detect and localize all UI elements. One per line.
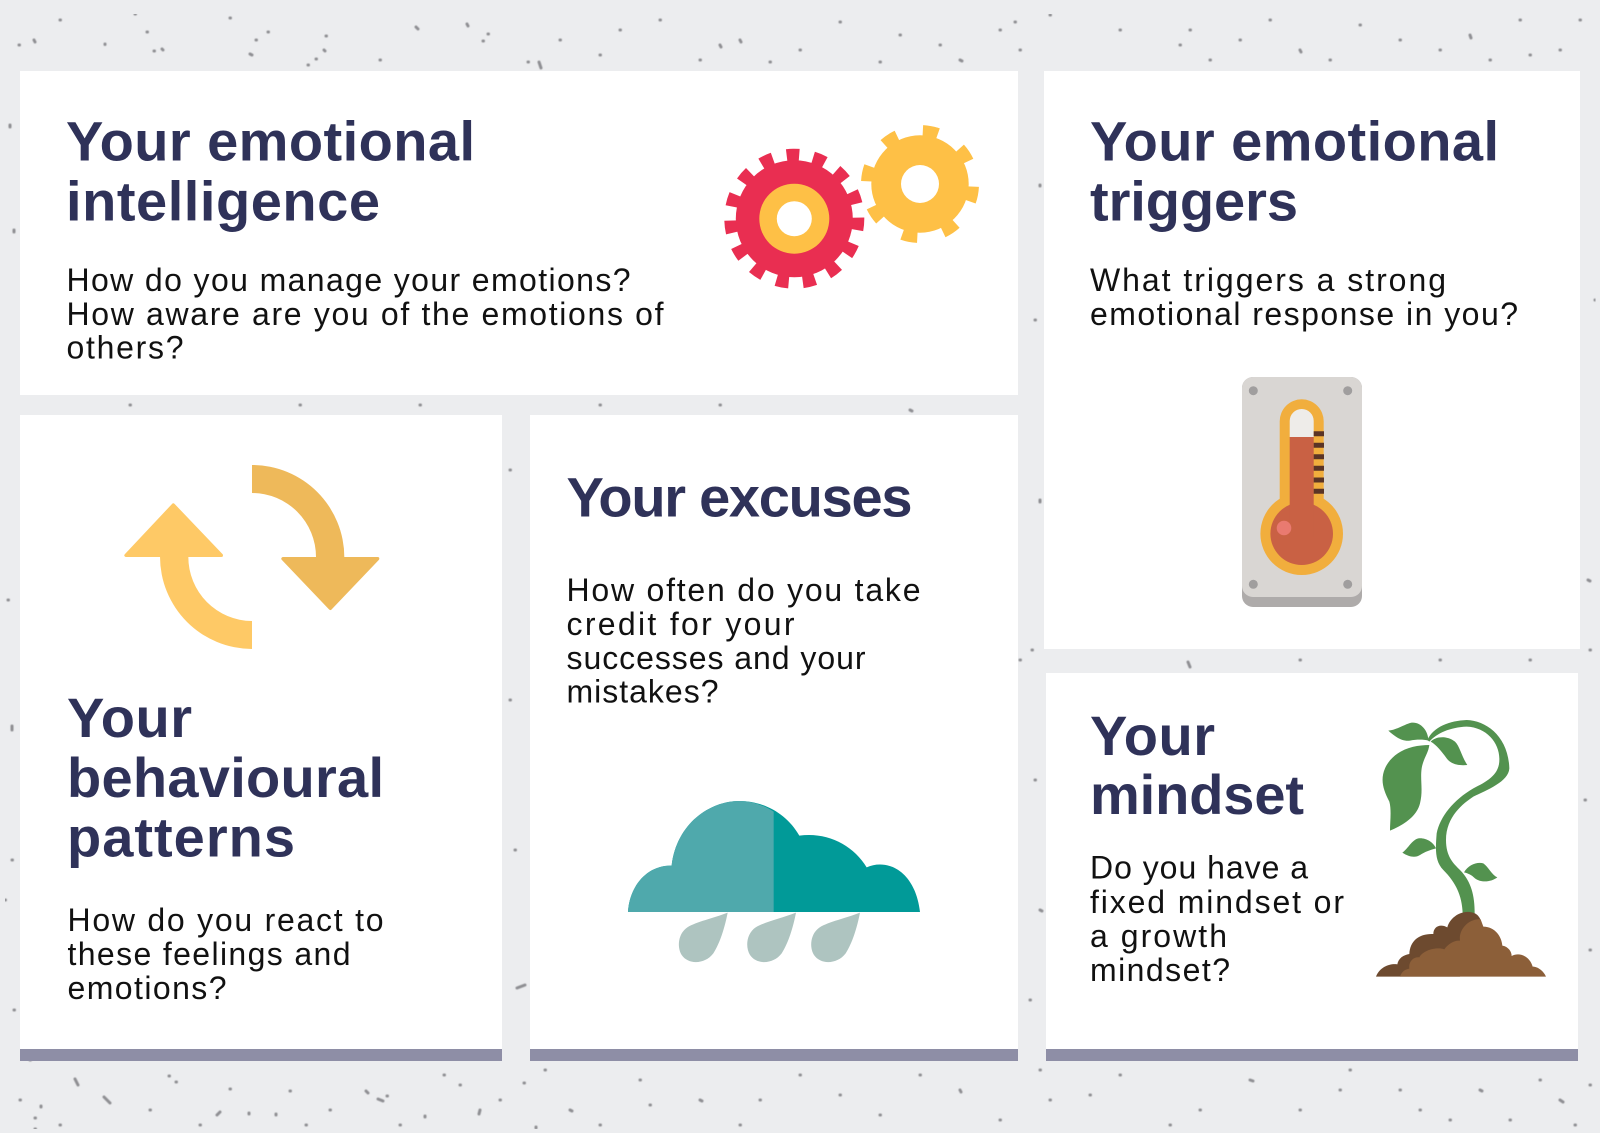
heading: Your behavioural patterns: patterns [67, 806, 295, 868]
text: behavioural patterns question: emotions? [68, 970, 226, 1006]
panel: excuses [530, 415, 1018, 1061]
text: excuses question: How often do you take [566, 572, 920, 608]
heading: Your emotional intelligence: intelligence [66, 170, 380, 232]
heading: Your behavioural patterns: Your [67, 686, 192, 749]
heading: Your mindset [1090, 704, 1304, 826]
text: mindset question: a growth [1090, 918, 1227, 954]
text: behavioural patterns question: these feelings and [68, 936, 350, 972]
text: emotional intelligence questions: How aware are you of the emotions of [66, 296, 664, 332]
text: excuses question: credit for your [566, 606, 795, 642]
heading: Your behavioural patterns: behavioural [67, 746, 384, 809]
icon: gears [730, 130, 974, 283]
text: behavioural patterns question: How do you react to [68, 902, 384, 938]
text: emotional intelligence questions: How do you manage your emotions? [66, 262, 630, 298]
text: excuses question: mistakes? [566, 674, 718, 710]
panel: emotional triggers [1044, 71, 1580, 649]
heading: Your mindset: Your [1090, 704, 1215, 767]
heading: Your emotional intelligence [66, 110, 475, 232]
heading: Your emotional triggers: Your emotional [1090, 110, 1499, 172]
icon: cycle arrows [126, 465, 378, 649]
footer bar [1046, 1049, 1578, 1061]
icon: sprouting plant [1376, 720, 1546, 977]
text: mindset question: fixed mindset or [1090, 884, 1344, 920]
heading: Your excuses: Your excuses [566, 466, 912, 528]
text: emotional triggers question: emotional response in you? [1090, 296, 1518, 332]
text: behavioural patterns question [68, 902, 384, 1006]
heading: Your behavioural patterns [67, 686, 384, 868]
panel: mindset [1046, 673, 1578, 1061]
text: emotional intelligence questions: others? [66, 330, 184, 366]
text: mindset question: mindset? [1090, 952, 1230, 988]
text: mindset question: Do you have a [1090, 850, 1308, 886]
footer bar [530, 1049, 1018, 1061]
heading: Your mindset: mindset [1090, 763, 1304, 826]
text: emotional intelligence questions [66, 262, 664, 366]
footer bar [20, 1049, 502, 1061]
text: emotional triggers question [1090, 262, 1518, 332]
text: excuses question: successes and your [566, 640, 866, 676]
heading: Your emotional triggers [1090, 110, 1499, 232]
heading: Your emotional intelligence: Your emotional [66, 110, 475, 172]
text: excuses question [566, 572, 920, 710]
icon: thermometer [1242, 377, 1362, 607]
heading: Your emotional triggers: triggers [1090, 170, 1298, 232]
panel: behavioural patterns [20, 415, 502, 1061]
text: mindset question [1090, 850, 1344, 988]
icon: rain cloud [628, 801, 920, 962]
panel: emotional intelligence [20, 71, 1018, 395]
text: emotional triggers question: What triggers a strong [1090, 262, 1446, 298]
